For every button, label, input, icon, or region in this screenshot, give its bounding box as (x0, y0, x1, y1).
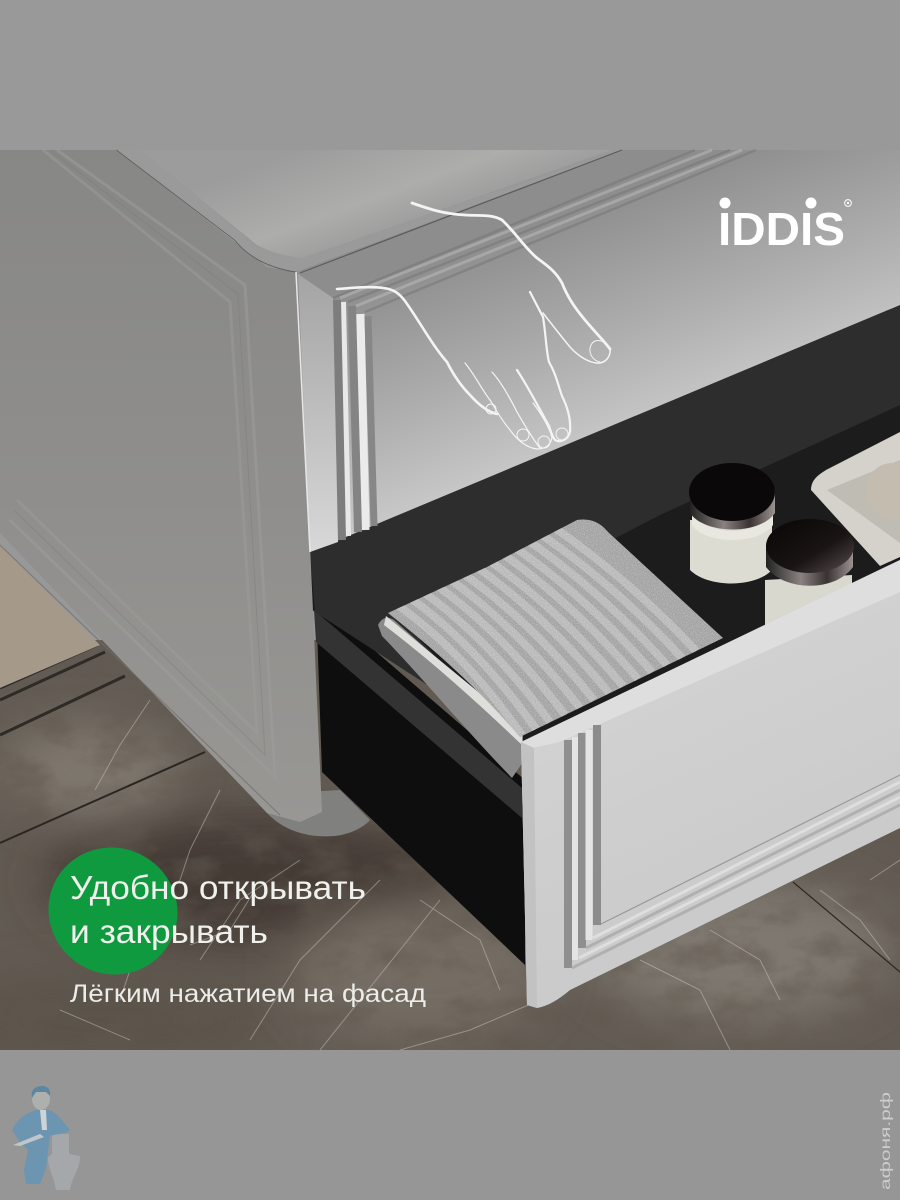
tray (811, 432, 900, 566)
hand line drawing (337, 203, 610, 449)
bottom grey band (0, 1050, 900, 1200)
logo: IDDIS: IDDIS (718, 203, 845, 255)
heading: Удобно открывать (70, 869, 366, 906)
lower drawer front (521, 560, 900, 1008)
jar left (689, 463, 775, 584)
caption text block (70, 869, 426, 1008)
top grey band (0, 0, 900, 150)
drawer black body (316, 600, 525, 965)
caption text block: Лёгким нажатием на фасад (70, 980, 426, 1008)
caption text block: и закрывать (70, 913, 268, 950)
side panel mouldings (0, 150, 297, 815)
jar right (765, 519, 854, 640)
drawer back wall (310, 305, 900, 745)
marble floor (0, 640, 900, 1065)
cabinet top band (117, 150, 640, 272)
product photo (0, 150, 900, 1065)
wall (0, 545, 100, 688)
drawer interior (310, 305, 900, 745)
upper drawer front (296, 150, 900, 552)
sea stone (866, 463, 900, 519)
cabinet top (140, 150, 612, 258)
green circle accent (25, 824, 201, 998)
icon: plumber with toilet (12, 1086, 80, 1190)
towel (378, 520, 723, 778)
watermark: афоня.рф: афоня.рф (877, 1092, 893, 1190)
upper drawer mouldings (296, 150, 756, 552)
drawer rail (314, 610, 522, 818)
side panel (0, 150, 322, 822)
plinth (255, 790, 370, 836)
